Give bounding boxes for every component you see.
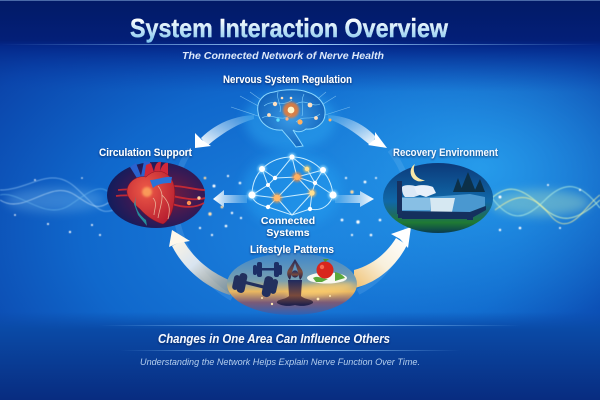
icon: neural network [242, 152, 342, 228]
node label: connected systems: Connected [261, 215, 315, 227]
left energy wave [0, 178, 130, 212]
node label: recovery environment: Recovery Environment [393, 147, 498, 159]
icon: brain [231, 90, 350, 150]
node label: connected systems: Systems [266, 227, 310, 239]
arrow: brain to circulation [195, 115, 254, 148]
footer text: Understanding the Network Helps Explain Nerve Function Over Time. [140, 357, 420, 367]
sparkles [261, 295, 331, 305]
bottom divider lower [120, 350, 460, 351]
title divider [0, 44, 600, 45]
bottom divider top [100, 325, 520, 326]
node label: nervous system regulation: Nervous System Regulation [223, 74, 352, 86]
takeaway headline: Changes in One Area Can Influence Others [158, 331, 390, 346]
node label: connected systems [261, 215, 315, 239]
node label: lifestyle patterns: Lifestyle Patterns [250, 244, 334, 256]
arrow: brain to recovery [328, 115, 387, 148]
node label: circulation support: Circulation Support [99, 147, 192, 159]
icon: large dumbbell [232, 272, 279, 298]
arrow: lifestyle to circulation [169, 230, 234, 295]
icon: yoga figure [277, 259, 313, 306]
right energy wave [485, 187, 600, 224]
title: System Interaction Overview [130, 13, 449, 43]
icon: lifestyle oval with weights, yoga, meal [227, 253, 357, 315]
icon: bed at night in oval [383, 163, 493, 233]
arrow: lifestyle to recovery [354, 227, 411, 288]
subtitle: The Connected Network of Nerve Health [182, 50, 384, 62]
arrow: network to circulation [213, 190, 247, 207]
icon: meal plate [307, 259, 347, 284]
arc halo ring [175, 150, 410, 298]
icon: heart in oval [107, 161, 205, 228]
icon: small dumbbell [253, 262, 282, 277]
arrow: network to recovery [335, 191, 374, 207]
sparkle particles [14, 175, 581, 236]
